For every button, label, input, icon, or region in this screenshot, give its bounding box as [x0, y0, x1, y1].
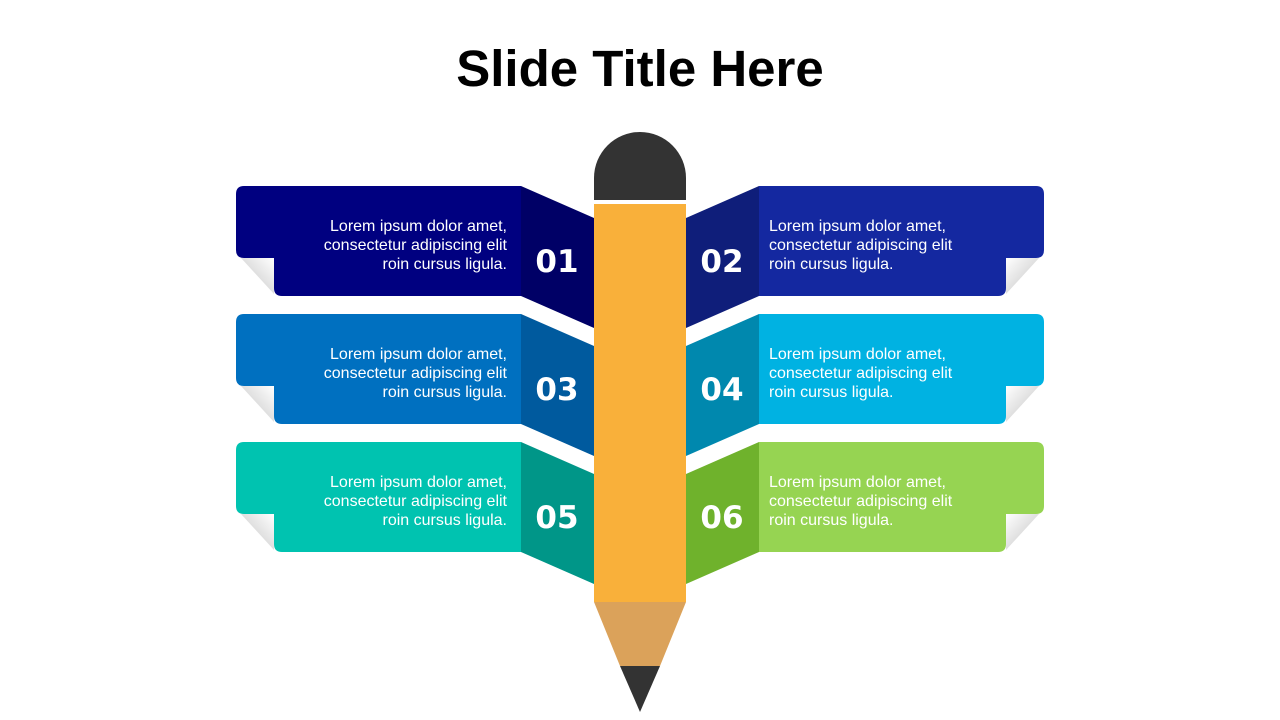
- banner 01: roin cursus ligula.: [382, 256, 507, 273]
- banner 05: 05: [535, 500, 579, 536]
- pencil lead: [620, 666, 660, 712]
- banner 05: roin cursus ligula.: [382, 512, 507, 529]
- banner 04: roin cursus ligula.: [769, 384, 894, 401]
- banner 04: consectetur adipiscing elit: [769, 365, 953, 382]
- banner 01: consectetur adipiscing elit: [324, 237, 508, 254]
- banner 02: roin cursus ligula.: [769, 256, 894, 273]
- banner 05: [236, 442, 594, 584]
- banner 05: Lorem ipsum dolor amet,: [330, 474, 507, 491]
- banner 06: Lorem ipsum dolor amet,: [769, 474, 946, 491]
- banner 04: 04: [700, 372, 744, 408]
- banner 02: consectetur adipiscing elit: [769, 237, 953, 254]
- banner 02: [686, 186, 1044, 328]
- pencil wood tip: [594, 602, 686, 666]
- banner 03: roin cursus ligula.: [382, 384, 507, 401]
- banner 03: [236, 314, 594, 456]
- pencil body: [594, 204, 686, 602]
- banner 01: Lorem ipsum dolor amet,: [330, 218, 507, 235]
- banner 04: [686, 314, 1044, 456]
- icon: pencil: [594, 132, 686, 712]
- title: Slide Title Here: [456, 40, 824, 97]
- banner 06: 06: [700, 500, 744, 536]
- banner 05: consectetur adipiscing elit: [324, 493, 508, 510]
- banner 06: roin cursus ligula.: [769, 512, 894, 529]
- banner 03: consectetur adipiscing elit: [324, 365, 508, 382]
- banner 02: 02: [700, 244, 744, 280]
- banner 06: consectetur adipiscing elit: [769, 493, 953, 510]
- banner 01: 01: [535, 244, 579, 280]
- banner 03: 03: [535, 372, 579, 408]
- banner 03: Lorem ipsum dolor amet,: [330, 346, 507, 363]
- pencil eraser cap: [594, 132, 686, 200]
- banner 06: [686, 442, 1044, 584]
- banner 01: [236, 186, 594, 328]
- banner 02: Lorem ipsum dolor amet,: [769, 218, 946, 235]
- banner 04: Lorem ipsum dolor amet,: [769, 346, 946, 363]
